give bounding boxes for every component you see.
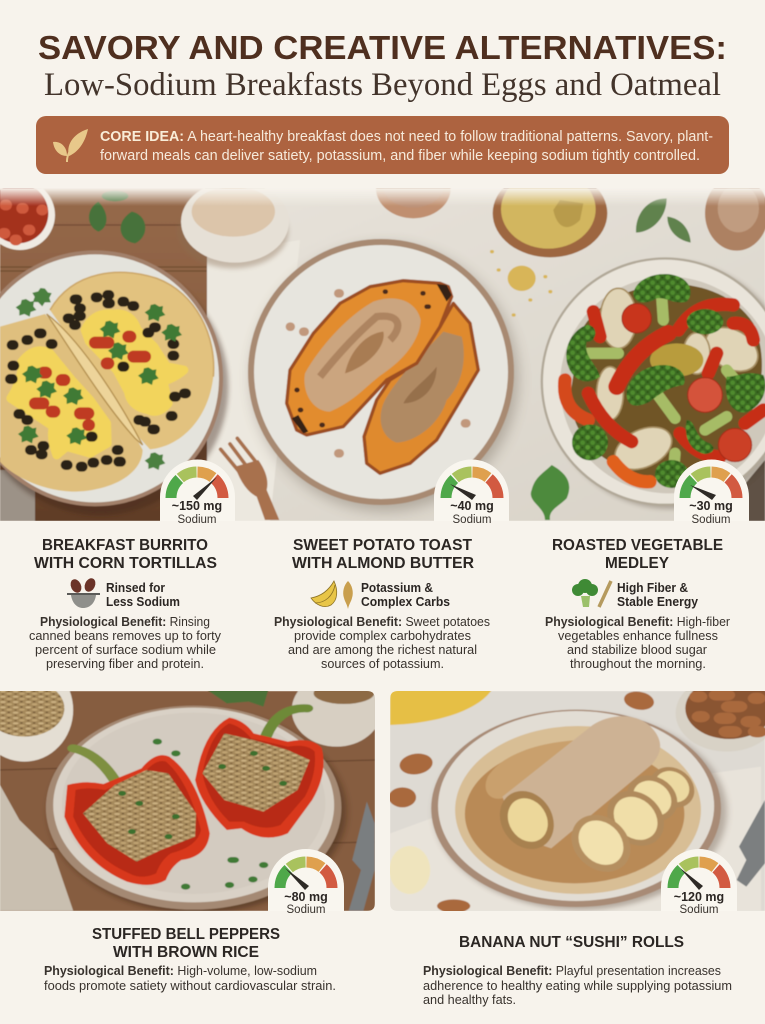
rice bowl: [0, 691, 74, 762]
core idea banner: CORE IDEA: A heart-healthy breakfast does not need to follow traditional patterns. Savory, plant-: [100, 129, 713, 145]
plate: [431, 710, 727, 910]
herb sprig: [207, 690, 268, 707]
wooden fork: [221, 438, 279, 520]
cherry tomatoes: [622, 304, 752, 462]
onion: [597, 288, 765, 478]
cinnamon dust: [290, 293, 466, 453]
panel: banana nut sushi rolls photo: [389, 675, 765, 913]
nutritional yeast bowl: [492, 188, 608, 258]
spice bowl: [376, 188, 451, 219]
cilantro: [89, 191, 145, 243]
gauge: peppers sodium: ~80 mg: [284, 890, 328, 904]
core idea banner: forward meals can deliver satiety, potassium, and fiber while keeping sodium tightly controlled.: [100, 148, 700, 164]
banana slice on table: [389, 846, 430, 894]
nutritional yeast clump: [650, 343, 703, 377]
gauge: vegetable sodium: ~30 mg: [689, 499, 733, 513]
benefit text: sources of potassium.: [321, 657, 444, 671]
almond bowl: [676, 675, 765, 752]
benefit text: vegetables enhance fullness: [558, 629, 718, 643]
panel: top photo with three dishes: [0, 158, 765, 521]
fork: [349, 802, 375, 911]
section: sweet potato text: [274, 537, 490, 671]
section: breakfast burrito text: [29, 537, 222, 671]
label: potassium: Complex Carbs: [361, 595, 450, 609]
benefit text: [29, 615, 222, 671]
label: fiber: [617, 581, 698, 609]
title: SAVORY AND CREATIVE ALTERNATIVES:: [38, 29, 727, 66]
pepper right: [195, 708, 324, 838]
food mound: [570, 284, 762, 480]
heading: MEDLEY: [605, 555, 670, 572]
right tortilla: [50, 272, 214, 449]
broccoli: [588, 297, 743, 473]
benefit text: and are among the richest natural: [288, 643, 477, 657]
icon: broccoli and wheat: [572, 579, 611, 607]
burrito plate: [0, 250, 228, 515]
heading: [292, 537, 474, 572]
heading: ROASTED VEGETABLE: [552, 537, 723, 554]
benefit text: Physiological Benefit: High-fiber: [545, 615, 730, 629]
benefit text: [423, 964, 732, 1007]
lower sweet potato: [364, 303, 478, 473]
tortilla: [455, 726, 701, 894]
gauge: sweet potato sodium: ~40 mg: [450, 499, 494, 513]
almond butter: [465, 745, 684, 883]
upper sweet potato: [287, 281, 452, 435]
label: rinsed: [106, 581, 180, 609]
benefit text: throughout the morning.: [570, 657, 706, 671]
tortilla fold: [47, 314, 143, 445]
icon: leaf: [53, 129, 88, 162]
benefit text: [545, 615, 730, 671]
linen napkin: [0, 785, 73, 911]
label: potassium: Potassium &: [361, 581, 433, 595]
pepper left: [64, 748, 210, 885]
gauge: sweet potato sodium: Sodium: [452, 514, 492, 526]
benefit text: canned beans removes up to forty: [29, 629, 222, 643]
label: fiber: Stable Energy: [617, 595, 698, 609]
gauge: banana roll sodium: ~120 mg: [674, 890, 724, 904]
label: fiber: High Fiber &: [617, 581, 688, 595]
parsley flecks: [157, 742, 264, 887]
gauge: peppers sodium: [268, 849, 344, 916]
gauge: vegetable sodium: Sodium: [692, 514, 730, 526]
heading: [34, 537, 217, 572]
heading: [92, 926, 280, 961]
wrap roll: [502, 716, 660, 848]
yeast crumbs: [492, 252, 551, 315]
basil leaves: [636, 198, 691, 243]
parsley: [531, 465, 569, 520]
scrambled egg: [11, 314, 184, 455]
heading: SWEET POTATO TOAST: [293, 537, 473, 554]
section: roasted vegetable text: [545, 537, 730, 671]
gauge: sweet potato sodium: [434, 460, 509, 526]
heading: BREAKFAST BURRITO: [42, 537, 208, 554]
benefit text: preserving fiber and protein.: [46, 657, 204, 671]
title: [38, 29, 727, 103]
cream pitcher: [178, 181, 289, 268]
banana: [390, 690, 492, 725]
heading: WITH ALMOND BUTTER: [292, 555, 474, 572]
benefit text: and healthy fats.: [423, 993, 516, 1007]
salsa bowl: [0, 180, 55, 250]
plate: [46, 706, 346, 913]
benefit text: percent of surface sodium while: [35, 643, 216, 657]
gauge: vegetable sodium: [674, 460, 749, 526]
cilantro garnish: [18, 304, 182, 445]
sweet potato plate: [248, 239, 518, 511]
linen cloth: [390, 767, 761, 911]
gauge: peppers sodium: Sodium: [286, 904, 326, 916]
pepper grinder: [704, 188, 765, 252]
salsa: [35, 337, 145, 425]
label: rinsed: Less Sodium: [106, 595, 180, 609]
benefit text: adherence to healthy eating while supplying potassium: [423, 979, 732, 993]
benefit text: Physiological Benefit: Rinsing: [40, 615, 210, 629]
title: Low-Sodium Breakfasts Beyond Eggs and Oatmeal: [44, 67, 721, 103]
vegetable bowl: [541, 257, 765, 509]
fork: [737, 800, 765, 887]
label: rinsed: Rinsed for: [106, 581, 165, 595]
label: potassium: [361, 581, 450, 609]
gauge: burrito sodium: ~150 mg: [172, 499, 222, 513]
roasted peppers: [565, 304, 763, 482]
benefit text: [44, 964, 336, 993]
heading: WITH CORN TORTILLAS: [34, 555, 217, 572]
benefit text: provide complex carbohydrates: [294, 629, 471, 643]
icon: beans in colander: [67, 577, 100, 608]
gauge: burrito sodium: Sodium: [178, 514, 216, 526]
heading: WITH BROWN RICE: [113, 944, 259, 961]
gauge: banana roll sodium: Sodium: [680, 904, 718, 916]
benefit text: and stabilize blood sugar: [567, 643, 707, 657]
core idea banner: [36, 116, 729, 174]
benefit text: Physiological Benefit: Sweet potatoes: [274, 615, 490, 629]
benefit text: Physiological Benefit: Playful presentation increases: [423, 964, 721, 978]
side bowl: [291, 691, 375, 748]
heading: BANANA NUT “SUSHI” ROLLS: [459, 934, 684, 951]
benefit text: Physiological Benefit: High-volume, low-sodium: [44, 964, 317, 978]
left tortilla: [0, 314, 143, 492]
heading: STUFFED BELL PEPPERS: [92, 926, 280, 943]
roll slices: [563, 764, 701, 876]
icon: banana and wheat: [311, 581, 353, 609]
section: banana sushi text: [423, 934, 732, 1007]
loose almonds: [389, 688, 659, 913]
section: stuffed peppers text: [44, 926, 336, 993]
heading: [552, 537, 723, 572]
panel: stuffed bell peppers photo: [0, 691, 375, 911]
black beans: [10, 295, 186, 467]
benefit text: foods promote satiety without cardiovascular strain.: [44, 979, 336, 993]
gauge: banana roll sodium: [661, 849, 737, 916]
gauge: burrito sodium: [160, 460, 235, 526]
benefit text: [274, 615, 490, 671]
